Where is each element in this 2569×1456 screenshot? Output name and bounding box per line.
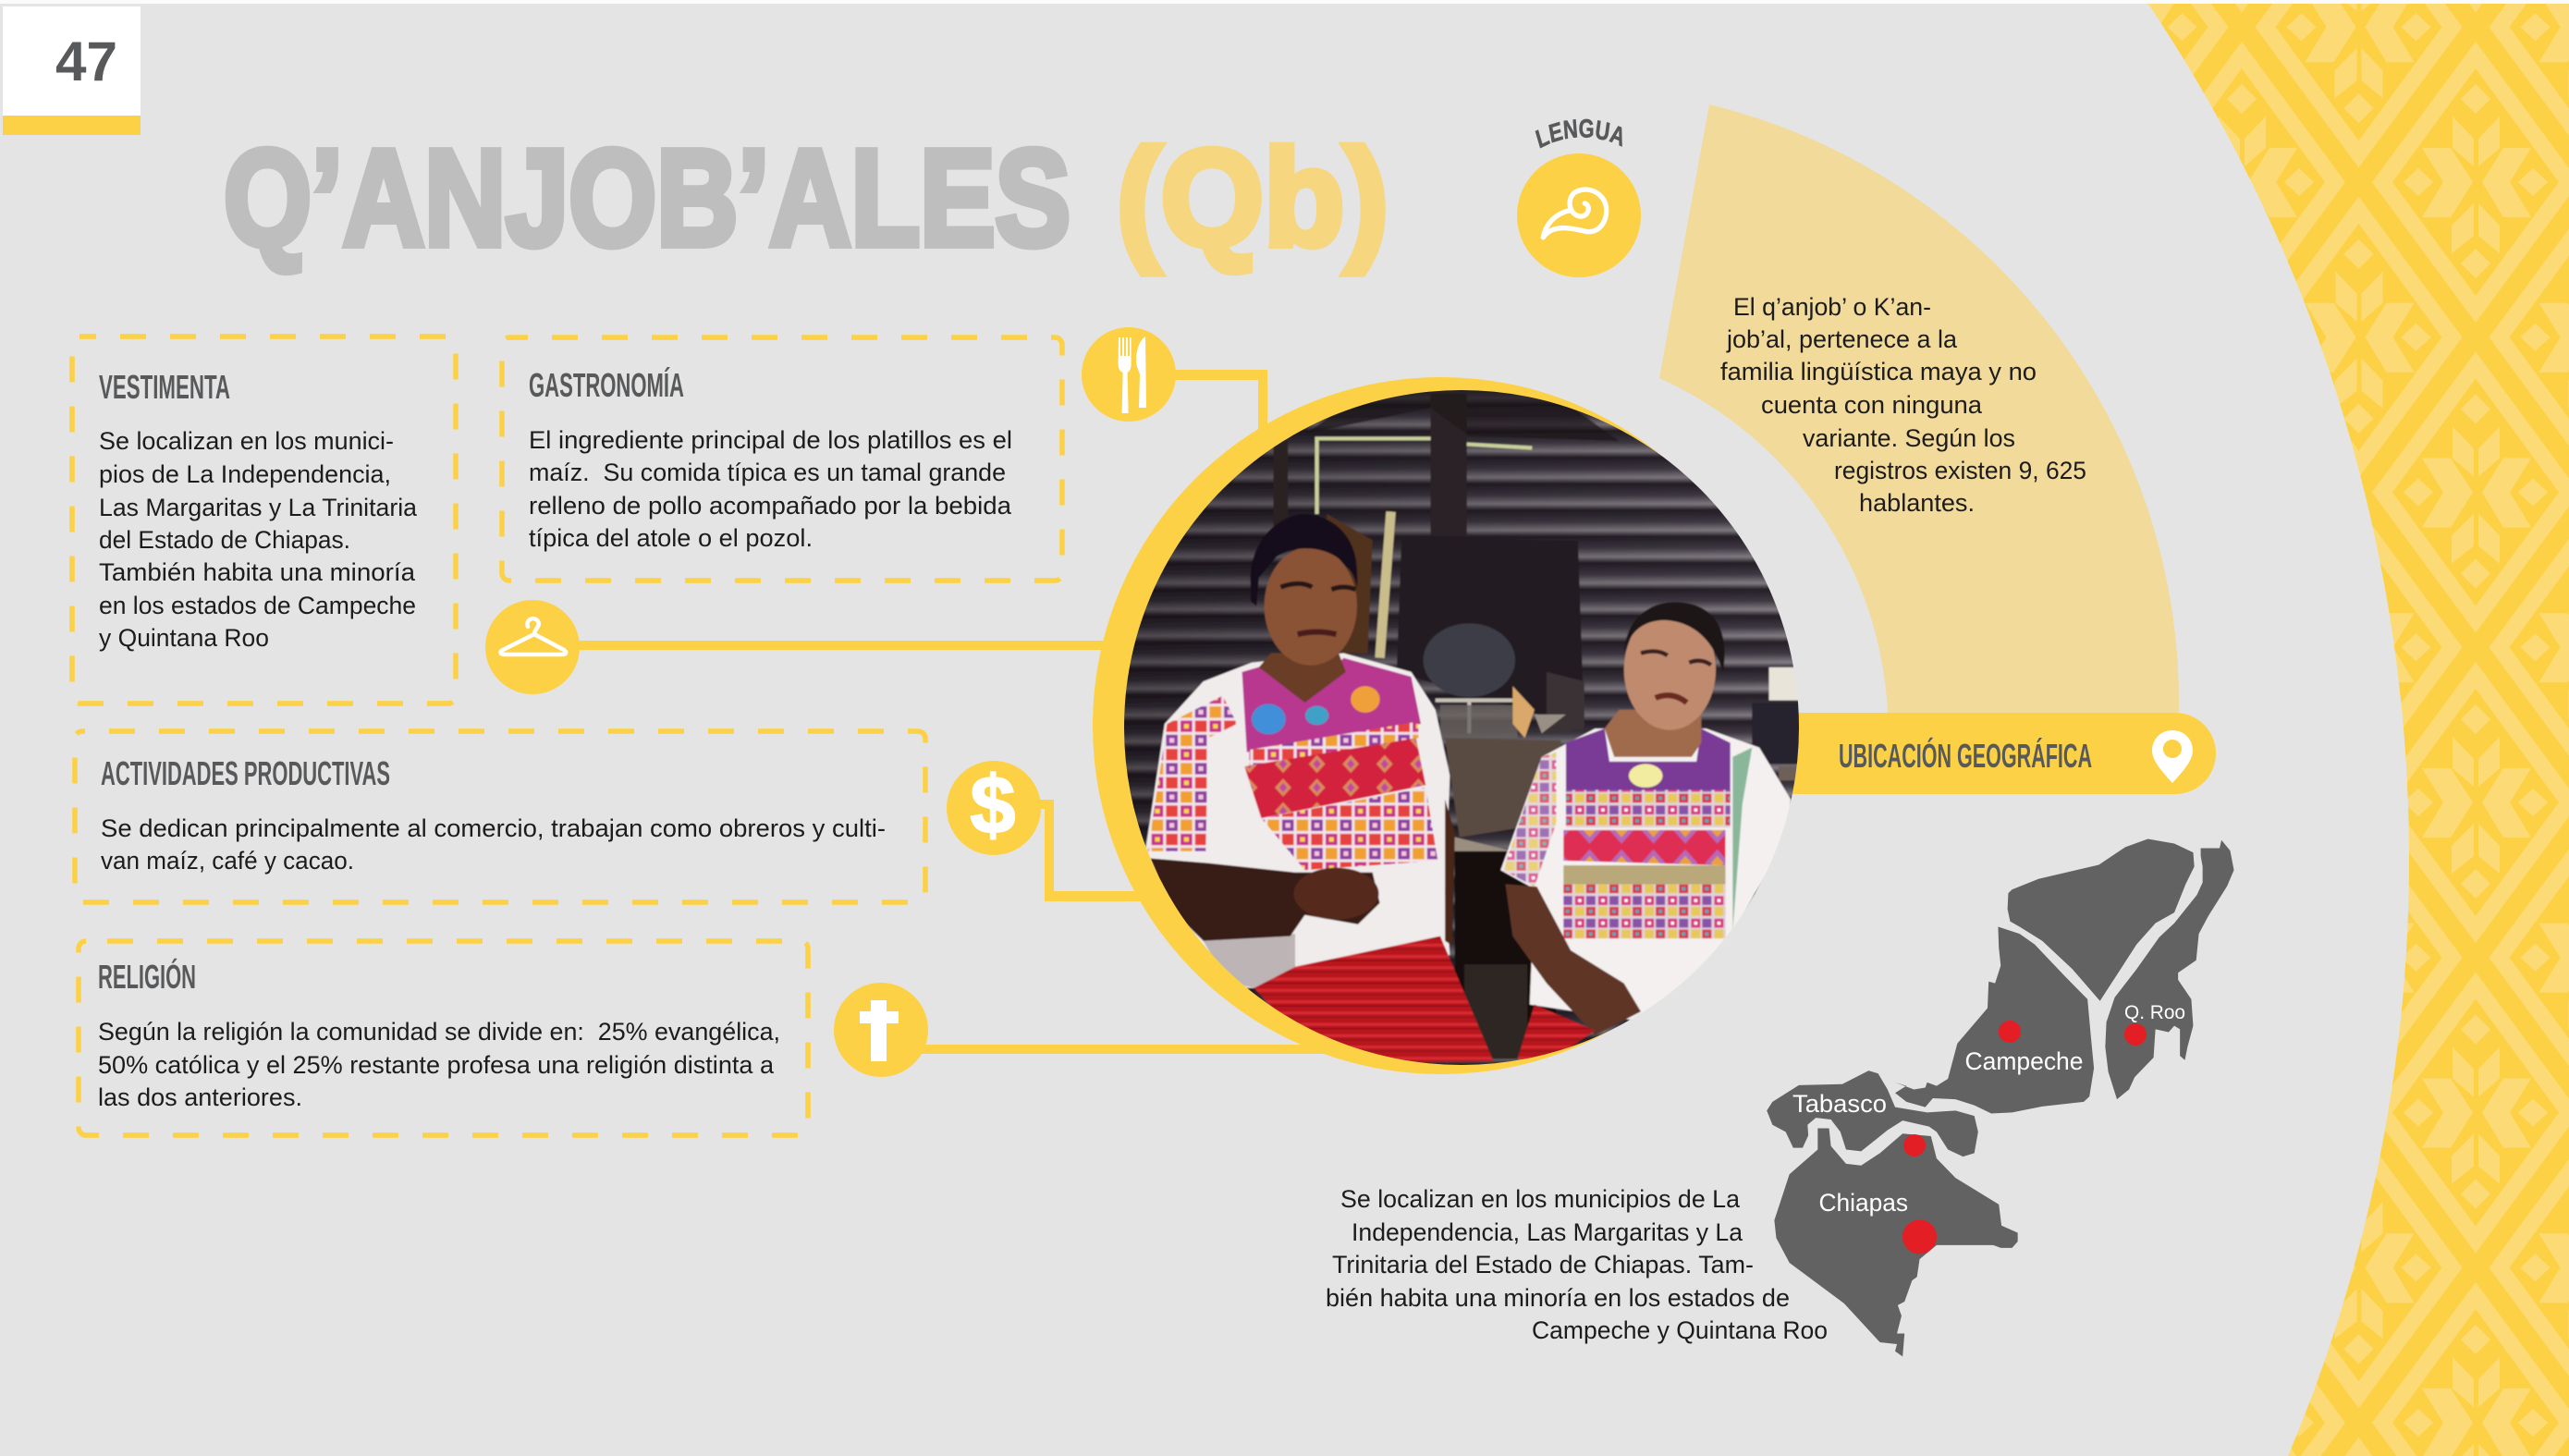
page number: 47 xyxy=(55,31,117,92)
text: vestimenta: Se localizan en los munici- xyxy=(99,427,394,455)
map markers xyxy=(1902,1021,2147,1254)
text: gastronomia: maíz. Su comida típica es un tamal grande xyxy=(529,459,1006,486)
lengua text: familia lingüística maya y no xyxy=(1720,358,2037,385)
icon: map pin xyxy=(2152,730,2193,783)
photo: two women in embroidered huipiles xyxy=(1124,390,1799,1065)
map labels: Q. Roo xyxy=(2124,1002,2185,1023)
text: gastronomia: relleno de pollo acompañado por la bebida xyxy=(529,492,1012,520)
panel: religion xyxy=(79,941,808,1135)
icon: cross xyxy=(834,983,928,1077)
text: ubicacion: Se localizan en los municipios de La xyxy=(1340,1185,1741,1213)
text: ubicacion xyxy=(1326,1185,1828,1344)
title: Q’ANJOB’ALES xyxy=(224,122,1070,275)
text: ubicacion: Campeche y Quintana Roo xyxy=(1532,1316,1828,1344)
map of states xyxy=(1767,839,2234,1356)
bar heading: UBICACIÓN GEOGRÁFICA xyxy=(1839,736,2092,775)
connector lines xyxy=(564,370,1331,1054)
text: gastronomia xyxy=(529,426,1012,552)
icon: lengua swirl xyxy=(1517,153,1641,277)
text: ubicacion: bién habita una minoría en los estados de xyxy=(1326,1284,1790,1312)
text: actividades xyxy=(101,814,886,875)
photo yellow ring xyxy=(1093,377,1790,1074)
text: vestimenta xyxy=(99,427,418,652)
lengua text xyxy=(1720,293,2086,517)
woven pattern band xyxy=(2080,0,2569,1456)
top white edge xyxy=(0,0,2569,4)
text: actividades: van maíz, café y cacao. xyxy=(101,847,354,875)
page number tab xyxy=(3,6,141,135)
heading: religion: RELIGIÓN xyxy=(98,957,196,996)
lengua text: variante. Según los xyxy=(1803,424,2015,452)
text: ubicacion: Trinitaria del Estado de Chiapas. Tam- xyxy=(1332,1251,1754,1279)
lengua text: hablantes. xyxy=(1859,489,1975,517)
lengua text: registros existen 9, 625 xyxy=(1834,457,2086,484)
icon: fork and knife xyxy=(1082,327,1176,422)
map labels: Chiapas xyxy=(1819,1189,1908,1217)
panel: actividades productivas xyxy=(75,731,925,902)
text: religion xyxy=(98,1018,780,1111)
heading: gastronomia: GASTRONOMÍA xyxy=(529,366,684,404)
heading: actividades: ACTIVIDADES PRODUCTIVAS xyxy=(101,754,390,792)
icon: hanger xyxy=(485,600,580,694)
left woman xyxy=(1145,654,1450,988)
text: vestimenta: y Quintana Roo xyxy=(99,624,269,652)
ubicacion geografica bar xyxy=(1756,713,2216,794)
lengua text: job’al, pertenece a la xyxy=(1726,325,1958,353)
text: religion: 50% católica y el 25% restante profesa una religión distinta a xyxy=(98,1051,775,1079)
text: vestimenta: pios de La Independencia, xyxy=(99,460,391,488)
lengua label: LENGUA xyxy=(1535,118,1622,148)
panel: vestimenta xyxy=(72,336,456,704)
title code: (Qb) xyxy=(1117,122,1388,275)
icon: dollar: $ xyxy=(971,759,1015,850)
text: ubicacion: Independencia, Las Margaritas y La xyxy=(1352,1218,1743,1246)
map labels xyxy=(1792,1002,2185,1217)
text: religion: Según la religión la comunidad se divide en: 25% evangélica, xyxy=(98,1018,780,1046)
map labels: Campeche xyxy=(1965,1047,2084,1075)
panel: gastronomia xyxy=(502,337,1062,581)
text: vestimenta: También habita una minoría xyxy=(99,558,416,586)
text: religion: las dos anteriores. xyxy=(98,1083,302,1111)
lengua text: El q’anjob’ o K’an- xyxy=(1733,293,1931,321)
text: vestimenta: del Estado de Chiapas. xyxy=(99,526,350,554)
lengua text: cuenta con ninguna xyxy=(1761,391,1983,419)
lengua arc panel xyxy=(1659,104,2179,713)
text: gastronomia: típica del atole o el pozol. xyxy=(529,524,813,552)
text: vestimenta: en los estados de Campeche xyxy=(99,592,416,619)
lengua label xyxy=(1535,118,1622,148)
map labels: Tabasco xyxy=(1792,1090,1887,1118)
right woman xyxy=(1500,728,1791,1021)
icon: dollar xyxy=(947,759,1041,855)
text: actividades: Se dedican principalmente al comercio, trabajan como obreros y culti- xyxy=(101,814,886,842)
heading: vestimenta: VESTIMENTA xyxy=(99,368,230,406)
text: vestimenta: Las Margaritas y La Trinitaria xyxy=(99,494,418,521)
text: gastronomia: El ingrediente principal de los platillos es el xyxy=(529,426,1012,454)
